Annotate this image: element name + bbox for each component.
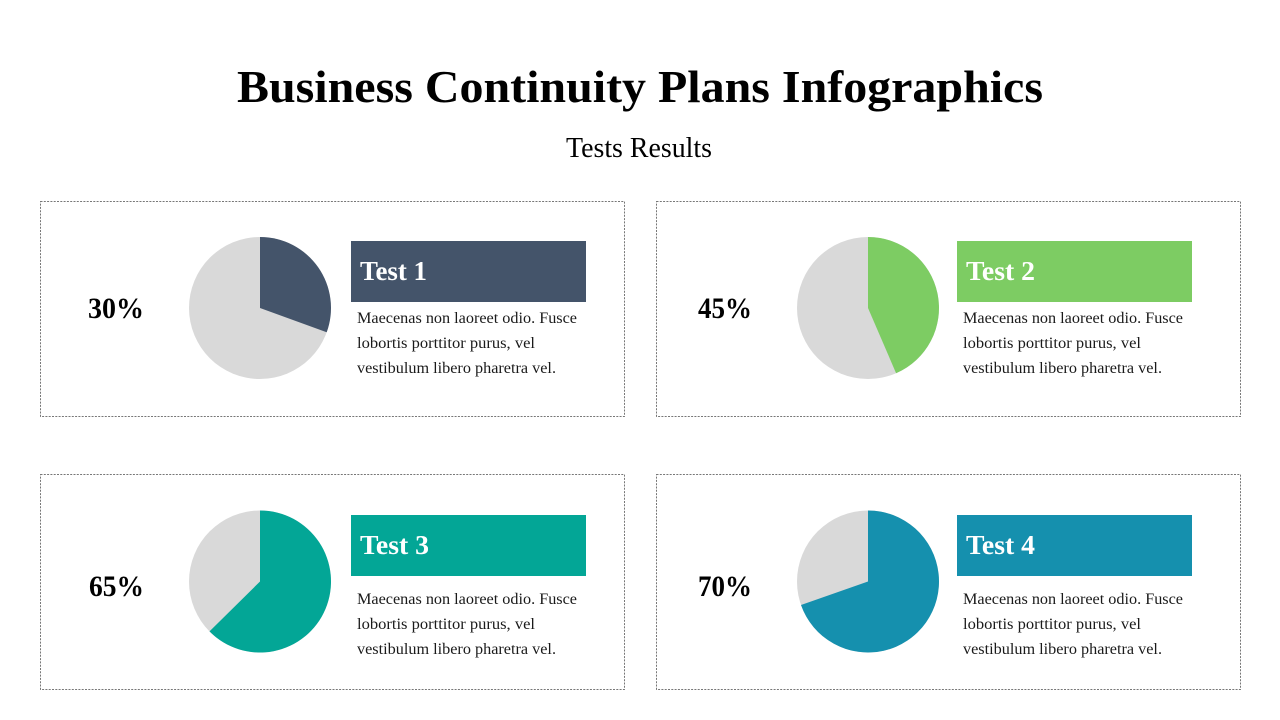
panel: test 2 (656, 202, 1240, 416)
text block: test 3: lobortis porttitor purus, vel (357, 616, 536, 633)
heading bar: test 2 (957, 241, 1192, 302)
heading bar: test 1: Test 1 (360, 256, 427, 286)
text block: test 2: Maecenas non laoreet odio. Fusce (963, 310, 1183, 327)
heading bar: test 4 (957, 515, 1192, 576)
text block: test 4: Maecenas non laoreet odio. Fusce (963, 591, 1183, 608)
panel frame: test 2 (656, 202, 1240, 416)
pie chart: 65% (189, 510, 331, 652)
text block: test 3: vestibulum libero pharetra vel. (357, 641, 556, 658)
percentage: 70%: 70% (698, 570, 752, 603)
heading bar: test 2: Test 2 (966, 256, 1035, 286)
panel frame: test 3 (40, 474, 624, 690)
text block: test 4 (963, 591, 1183, 658)
heading bar: test 3 (351, 515, 586, 576)
text block: test 2 (963, 310, 1183, 377)
text block: test 1: lobortis porttitor purus, vel (357, 335, 536, 352)
percentage: 65%: 65% (89, 570, 144, 603)
percentage: 30%: 30% (88, 292, 144, 325)
panel: test 4 (656, 474, 1240, 690)
text block: test 4: lobortis porttitor purus, vel (963, 616, 1142, 633)
title: Business Continuity Plans Infographics (237, 61, 1043, 112)
percentage: 45%: 45% (698, 292, 752, 325)
heading bar: test 1 (351, 241, 586, 302)
pie chart: 70% (797, 510, 939, 652)
text block: test 1: vestibulum libero pharetra vel. (357, 360, 556, 377)
text block: test 2: vestibulum libero pharetra vel. (963, 360, 1162, 377)
subtitle: Tests Results (566, 133, 712, 164)
text block: test 3 (357, 591, 577, 658)
heading bar: test 3: Test 3 (360, 530, 429, 560)
text block: test 4: vestibulum libero pharetra vel. (963, 641, 1162, 658)
panel: test 1 (40, 202, 624, 416)
panel frame: test 4 (656, 474, 1240, 690)
pie chart: 45% (797, 237, 939, 379)
text block: test 3: Maecenas non laoreet odio. Fusce (357, 591, 577, 608)
pie chart: 30% (189, 237, 331, 379)
panel: test 3 (40, 474, 624, 690)
text block: test 1: Maecenas non laoreet odio. Fusce (357, 310, 577, 327)
panel frame: test 1 (40, 202, 624, 416)
text block: test 1 (357, 310, 577, 377)
text block: test 2: lobortis porttitor purus, vel (963, 335, 1142, 352)
heading bar: test 4: Test 4 (966, 530, 1035, 560)
